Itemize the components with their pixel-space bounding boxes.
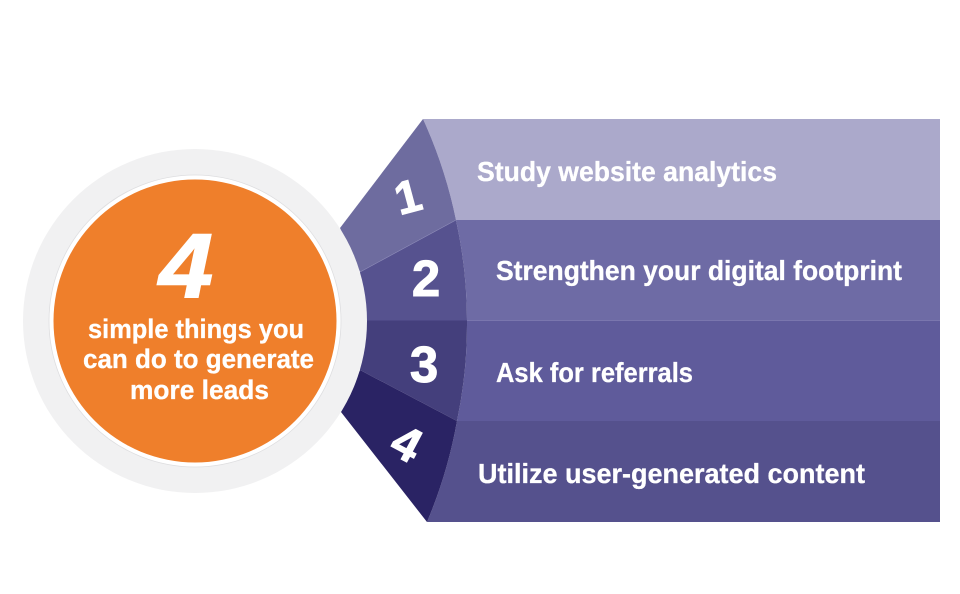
orange disc: [54, 180, 336, 462]
circle caption: more leads: [130, 375, 269, 405]
white ring: [49, 175, 341, 467]
circle caption: simple things you: [88, 314, 304, 344]
circle caption: [83, 314, 314, 405]
panel: central circle: [23, 149, 367, 493]
number 3: 3: [410, 336, 438, 393]
item labels: [477, 156, 902, 489]
label 2: Strengthen your digital footprint: [496, 255, 902, 286]
number 2: 2: [412, 250, 440, 307]
circle caption: can do to generate: [83, 344, 314, 374]
big number 4: 4: [157, 216, 213, 317]
band 2: [456, 220, 940, 320]
wedge 2: [360, 220, 467, 320]
band 3: [457, 320, 940, 421]
band 1: [423, 119, 940, 220]
number 1: 1: [389, 168, 427, 225]
label 3: Ask for referrals: [496, 357, 693, 388]
label 4: Utilize user-generated content: [478, 458, 865, 489]
outer grey ring: [23, 149, 367, 493]
wedge numbers: [382, 168, 440, 474]
wedge 4: [341, 370, 457, 522]
panel: number wedges: [340, 119, 467, 522]
label 1: Study website analytics: [477, 156, 777, 187]
number 4: 4: [382, 415, 431, 474]
band 4: [427, 421, 940, 522]
panel: item bands: [423, 119, 940, 522]
wedge 3: [360, 320, 467, 421]
wedge 1: [340, 119, 456, 272]
